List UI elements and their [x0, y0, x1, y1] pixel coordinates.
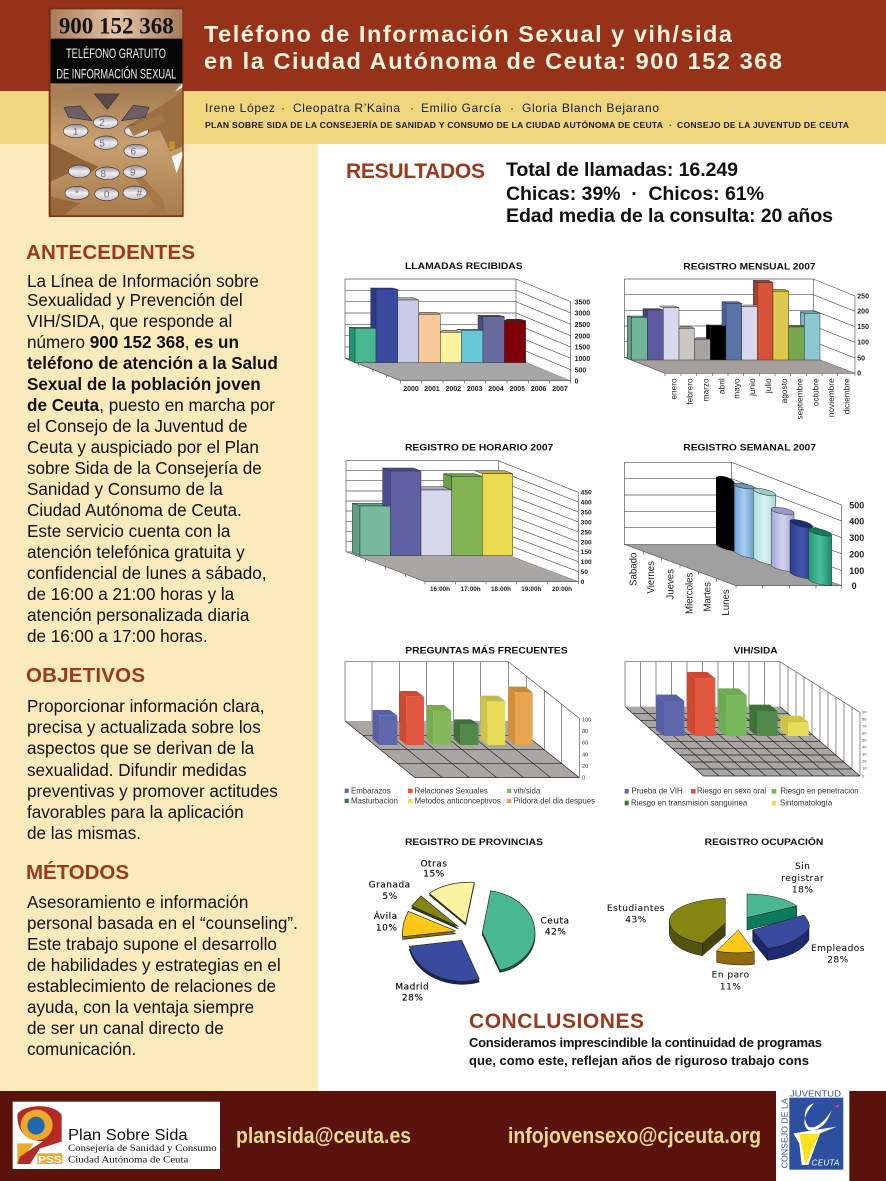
- text: objetivos: precisa y actualizada sobre los: [27, 718, 261, 737]
- chart: llamadas recibidas: [345, 261, 590, 393]
- chart: registro de provincias: 28%: [402, 994, 423, 1004]
- poster photo: keypad on body: 9: [130, 168, 136, 179]
- logo: consejo de la juventud: [776, 1088, 849, 1181]
- chart: registro mensual 2007: junio: [747, 378, 757, 397]
- chart: registro de horario 2007: 18:00h: [491, 586, 511, 593]
- chart: registro mensual 2007: 50: [857, 355, 865, 362]
- text: objetivos: de las mismas.: [27, 824, 141, 843]
- text: conclusiones: que, como este, reflejan años de riguroso trabajo cons: [469, 1053, 809, 1068]
- chart: preguntas mas frecuentes: 100: [582, 717, 591, 723]
- chart: registro mensual 2007: [624, 261, 869, 420]
- chart: registro mensual 2007: abril: [716, 378, 726, 394]
- chart: llamadas recibidas: 2005: [510, 386, 525, 393]
- text: antecedentes: número 900 152 368, es un: [27, 333, 239, 352]
- chart: llamadas recibidas: 2000: [575, 333, 590, 340]
- poster photo: keypad on body: 0: [104, 190, 110, 201]
- chart: registro de horario 2007: 100: [581, 559, 592, 566]
- text: antecedentes: de 16:00 a 17:00 horas.: [27, 627, 208, 646]
- poster photo: keypad on body: 5: [99, 138, 105, 149]
- header title: en la Ciudad Autónoma de Ceuta: 900 152 368: [204, 48, 782, 74]
- chart: registro de horario 2007: 19:00h: [521, 586, 541, 593]
- chart: registro de provincias: 5%: [382, 892, 398, 902]
- chart: registro de horario 2007: 450: [581, 490, 592, 497]
- text: metodos: Asesoramiento e información: [27, 893, 248, 912]
- chart: vih/sida: Riesgo en transmisión sanguínea: [631, 798, 748, 807]
- chart: registro ocupacion: En paro: [712, 971, 750, 981]
- chart: llamadas recibidas: 1000: [575, 356, 590, 363]
- chart: registro de provincias: 10%: [376, 923, 397, 933]
- chart: registro semanal 2007: Sabado: [628, 553, 639, 586]
- chart: registro ocupacion: Sin: [795, 862, 810, 872]
- chart: vih/sida: [625, 645, 866, 807]
- logo: plan sobre sida: [13, 1102, 220, 1169]
- chart: vih/sida: Riesgo en sexo oral: [697, 787, 766, 796]
- text: objetivos: aspectos que se derivan de la: [27, 739, 255, 758]
- poster photo: keypad on body: DE INFORMACIÓN SEXUAL: [56, 65, 176, 81]
- text: metodos: de ser un canal directo de: [27, 1019, 224, 1038]
- text: metodos: [27, 893, 298, 1059]
- authors: [205, 101, 659, 115]
- text: objetivos: favorables para la aplicación: [27, 803, 244, 822]
- poster photo: keypad on body: 1: [73, 127, 79, 138]
- chart: registro mensual 2007: 150: [857, 324, 869, 331]
- chart: vih/sida: 50: [862, 739, 866, 743]
- poster photo: keypad on body: 8: [101, 169, 107, 180]
- chart: llamadas recibidas: 3500: [575, 299, 590, 306]
- authors: Irene López: [205, 101, 275, 115]
- chart: registro de provincias: Madrid: [395, 982, 429, 992]
- text: antecedentes: La Línea de Información sobre: [27, 272, 259, 291]
- chart: registro ocupacion: REGISTRO OCUPACIÓN: [705, 836, 823, 847]
- chart: preguntas mas frecuentes: 40: [582, 752, 588, 758]
- text: antecedentes: atención personalizada diaria: [27, 606, 250, 625]
- chart: registro de horario 2007: 350: [581, 509, 592, 516]
- chart: preguntas mas frecuentes: Metodos anticonceptivos: [415, 796, 501, 805]
- chart: llamadas recibidas: 3000: [575, 311, 590, 318]
- institutions line: CONSEJO DE LA JUVENTUD DE CEUTA: [677, 120, 849, 130]
- text: metodos: personal basada en el “counseling”.: [27, 914, 298, 933]
- key results: Chicas: 39% · Chicos: 61%: [506, 183, 764, 205]
- text: antecedentes: atención telefónica gratuita y: [27, 543, 245, 562]
- poster photo: keypad on body: *: [75, 189, 79, 200]
- chart: llamadas recibidas: 1500: [575, 345, 590, 352]
- text: antecedentes: el Consejo de la Juventud de: [27, 417, 247, 436]
- institutions line: [205, 119, 849, 130]
- text: antecedentes: Sexualidad y Prevención del: [27, 291, 243, 310]
- chart: registro de horario 2007: [346, 443, 592, 593]
- chart: registro mensual 2007: agosto: [779, 378, 789, 403]
- key results: Total de llamadas: 16.249: [506, 159, 738, 181]
- authors: ·: [510, 101, 514, 115]
- text: antecedentes: Ceuta y auspiciado por el Plan: [27, 438, 259, 457]
- chart: registro mensual 2007: noviembre: [826, 378, 836, 417]
- chart: llamadas recibidas: 2003: [467, 386, 483, 393]
- heading: resultados: RESULTADOS: [346, 160, 485, 183]
- header title: Teléfono de Información Sexual y vih/sida: [204, 21, 733, 47]
- chart: preguntas mas frecuentes: 60: [582, 740, 588, 746]
- chart: vih/sida: Riesgo en penetración: [780, 787, 859, 796]
- chart: vih/sida: 80: [862, 718, 866, 722]
- chart: preguntas mas frecuentes: Masturbacion: [351, 796, 398, 805]
- chart: vih/sida: 40: [862, 746, 866, 750]
- chart: vih/sida: 60: [862, 732, 866, 736]
- chart: llamadas recibidas: LLAMADAS RECIBIDAS: [405, 261, 523, 271]
- chart: registro mensual 2007: septiembre: [795, 378, 805, 420]
- text: antecedentes: [27, 272, 278, 646]
- chart: vih/sida: 0: [862, 774, 864, 778]
- text: antecedentes: confidencial de lunes a sábado,: [27, 564, 266, 583]
- chart: registro ocupacion: 28%: [827, 956, 849, 966]
- chart: registro de provincias: REGISTRO DE PROVINCIAS: [405, 837, 543, 847]
- chart: registro de horario 2007: 17:00h: [461, 586, 481, 593]
- chart: registro semanal 2007: 400: [849, 516, 864, 526]
- chart: registro de provincias: [369, 837, 569, 1004]
- text: antecedentes: VIH/SIDA, que responde al: [27, 312, 232, 331]
- text: objetivos: preventivas y promover actitudes: [27, 782, 278, 801]
- chart: registro de horario 2007: 300: [581, 519, 592, 526]
- chart: registro semanal 2007: [624, 443, 864, 616]
- text: antecedentes: Este servicio cuenta con la: [27, 522, 231, 541]
- authors: Cleopatra R’Kaina: [293, 101, 400, 115]
- heading: objetivos: OBJETIVOS: [26, 664, 145, 687]
- text: metodos: Este trabajo supone el desarrollo: [27, 935, 277, 954]
- chart: registro ocupacion: 11%: [720, 982, 741, 992]
- chart: registro de horario 2007: 50: [581, 569, 588, 576]
- chart: registro semanal 2007: Viernes: [646, 561, 657, 594]
- chart: registro ocupacion: 43%: [625, 916, 647, 926]
- text: metodos: ayuda, con la ventaja siempre: [27, 998, 254, 1017]
- chart: vih/sida: VIH/SIDA: [734, 645, 778, 655]
- chart: registro de horario 2007: 0: [581, 579, 585, 586]
- logo: plan sobre sida: Plan Sobre Sida: [68, 1127, 188, 1144]
- text: metodos: comunicación.: [27, 1040, 136, 1059]
- chart: registro de horario 2007: 20:00h: [552, 586, 572, 593]
- chart: registro de horario 2007: 400: [581, 499, 592, 506]
- chart: registro semanal 2007: Lunes: [721, 589, 732, 616]
- text: antecedentes: Ciudad Autónoma de Ceuta.: [27, 501, 242, 520]
- logo: consejo de la juventud: CEUTA: [812, 1158, 839, 1167]
- poster photo: keypad on body: 2: [99, 118, 105, 129]
- chart: vih/sida: 10: [862, 767, 866, 771]
- chart: llamadas recibidas: 0: [575, 379, 579, 386]
- text: metodos: de habilidades y estrategias en el: [27, 956, 281, 975]
- chart: vih/sida: Prueba de VIH: [631, 787, 683, 796]
- poster photo: keypad on body: 6: [131, 147, 137, 158]
- heading: antecedentes: ANTECEDENTES: [26, 241, 195, 264]
- text: objetivos: [27, 697, 278, 843]
- chart: registro semanal 2007: Martes: [703, 582, 714, 612]
- chart: llamadas recibidas: 2002: [446, 386, 461, 393]
- chart: registro mensual 2007: 250: [857, 293, 869, 300]
- chart: registro de horario 2007: 250: [581, 529, 592, 536]
- chart: registro semanal 2007: 200: [849, 549, 864, 559]
- chart: vih/sida: Sintomatología: [780, 798, 833, 807]
- authors: ·: [410, 101, 414, 115]
- chart: llamadas recibidas: 2006: [531, 386, 547, 393]
- authors: Emilio García: [421, 101, 501, 115]
- chart: registro semanal 2007: 0: [852, 581, 857, 591]
- poster photo: keypad on body: [49, 8, 184, 217]
- chart: llamadas recibidas: 2007: [552, 386, 568, 393]
- logo: plan sobre sida: PSS: [38, 1155, 62, 1166]
- text: antecedentes: Sanidad y Consumo de la: [27, 480, 223, 499]
- chart: preguntas mas frecuentes: 80: [582, 729, 588, 735]
- chart: llamadas recibidas: 2004: [488, 386, 504, 393]
- chart: llamadas recibidas: 2000: [403, 386, 419, 393]
- chart: registro mensual 2007: octubre: [810, 378, 820, 406]
- institutions line: PLAN SOBRE SIDA DE LA CONSEJERÍA DE SANIDAD Y CONSUMO DE LA CIUDAD AUTÓNOMA DE CEUTA: [205, 119, 663, 130]
- chart: registro de provincias: Otras: [420, 859, 447, 869]
- chart: preguntas mas frecuentes: PREGUNTAS MÁS FRECUENTES: [405, 644, 568, 655]
- chart: registro mensual 2007: enero: [669, 378, 679, 400]
- logo: consejo de la juventud: CONSEJO DE LA: [780, 1098, 790, 1168]
- chart: vih/sida: 90: [862, 711, 866, 715]
- chart: registro de horario 2007: 16:00h: [430, 586, 450, 593]
- chart: registro mensual 2007: marzo: [701, 378, 711, 401]
- chart: registro de provincias: Ceuta: [540, 916, 569, 926]
- chart: registro mensual 2007: REGISTRO MENSUAL 2007: [683, 261, 816, 271]
- heading: metodos: MÉTODOS: [26, 861, 129, 884]
- chart: registro ocupacion: 18%: [792, 886, 813, 896]
- chart: preguntas mas frecuentes: Pildora del dia despues: [514, 796, 595, 805]
- chart: registro ocupacion: [607, 836, 865, 992]
- authors: Gloria Blanch Bejarano: [522, 101, 659, 115]
- chart: registro de provincias: Granada: [369, 881, 411, 891]
- header title: [204, 21, 782, 74]
- chart: preguntas mas frecuentes: [345, 644, 595, 805]
- chart: registro mensual 2007: julio: [763, 378, 773, 394]
- authors: ·: [281, 101, 285, 115]
- chart: vih/sida: 30: [862, 753, 866, 757]
- chart: registro mensual 2007: 100: [857, 340, 869, 347]
- text: antecedentes: Sexual de la población joven: [27, 375, 261, 394]
- chart: registro semanal 2007: 500: [849, 500, 864, 510]
- logo: plan sobre sida: Consejería de Sanidad y Consumo: [68, 1143, 217, 1153]
- poster photo: keypad on body: 900 152 368: [59, 14, 174, 40]
- text: antecedentes: teléfono de atención a la Salud: [27, 354, 278, 373]
- heading: conclusiones: CONCLUSIONES: [469, 1010, 644, 1033]
- chart: registro de horario 2007: 200: [581, 539, 592, 546]
- chart: registro mensual 2007: febrero: [684, 378, 694, 405]
- chart: registro ocupacion: Estudiantes: [607, 904, 665, 914]
- footer email: info joven: infojovensexo@cjceuta.org: [508, 1123, 761, 1148]
- chart: vih/sida: 70: [862, 725, 866, 729]
- text: objetivos: sexualidad. Difundir medidas: [27, 761, 246, 780]
- chart: registro de horario 2007: 150: [581, 549, 592, 556]
- chart: registro semanal 2007: Jueves: [665, 569, 676, 600]
- logo: consejo de la juventud: JUVENTUD: [790, 1088, 841, 1098]
- chart: registro mensual 2007: diciembre: [842, 378, 852, 414]
- chart: llamadas recibidas: 500: [575, 367, 586, 374]
- poster photo: keypad on body: #: [137, 188, 143, 199]
- chart: registro semanal 2007: 300: [849, 533, 864, 543]
- poster photo: keypad on body: TELÉFONO GRATUITO: [66, 45, 166, 61]
- text: conclusiones: [469, 1035, 822, 1068]
- chart: registro ocupacion: Empleados: [811, 944, 865, 954]
- footer email: plan sida: plansida@ceuta.es: [236, 1123, 411, 1148]
- chart: preguntas mas frecuentes: Embarazos: [351, 786, 391, 795]
- text: conclusiones: Consideramos imprescindible la continuidad de programas: [469, 1035, 822, 1050]
- chart: preguntas mas frecuentes: 20: [582, 764, 588, 770]
- chart: registro mensual 2007: 0: [857, 371, 861, 378]
- chart: registro semanal 2007: REGISTRO SEMANAL 2007: [683, 443, 816, 453]
- key results: [506, 159, 833, 227]
- chart: registro de provincias: 42%: [545, 928, 566, 938]
- chart: preguntas mas frecuentes: 0: [582, 776, 585, 782]
- chart: registro ocupacion: registrar: [781, 874, 824, 884]
- chart: registro de provincias: 15%: [423, 870, 445, 880]
- institutions line: ·: [669, 120, 672, 130]
- chart: llamadas recibidas: 2001: [424, 386, 440, 393]
- chart: preguntas mas frecuentes: Relaciones Sexuales: [415, 786, 488, 795]
- chart: vih/sida: 20: [862, 760, 866, 764]
- text: metodos: establecimiento de relaciones de: [27, 977, 276, 996]
- chart: llamadas recibidas: 2500: [575, 322, 590, 329]
- text: antecedentes: sobre Sida de la Consejería de: [27, 459, 262, 478]
- chart: registro mensual 2007: mayo: [731, 378, 741, 399]
- chart: registro semanal 2007: 100: [849, 566, 864, 576]
- text: antecedentes: de 16:00 a 21:00 horas y la: [27, 585, 235, 604]
- chart: registro de horario 2007: REGISTRO DE HORARIO 2007: [405, 443, 553, 453]
- chart: registro semanal 2007: Miercoles: [684, 572, 695, 614]
- chart: registro mensual 2007: 200: [857, 309, 869, 316]
- chart: registro de provincias: Ávila: [374, 910, 398, 922]
- chart: preguntas mas frecuentes: vih/sida: [514, 786, 541, 795]
- text: antecedentes: de Ceuta, puesto en marcha por: [27, 396, 275, 415]
- text: objetivos: Proporcionar información clara,: [27, 697, 265, 716]
- logo: plan sobre sida: Ciudad Autónoma de Ceuta: [68, 1154, 188, 1164]
- key results: Edad media de la consulta: 20 años: [506, 205, 833, 227]
